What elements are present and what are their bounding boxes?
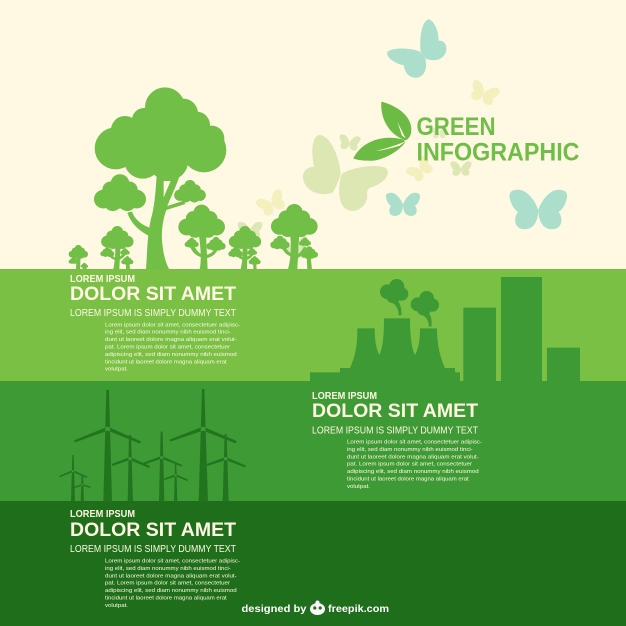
butterfly: pale yellow middle xyxy=(405,154,436,184)
building 2 xyxy=(501,277,542,381)
section 2 body: Lorem ipsum dolor sit amet, consectetuer adipisc- xyxy=(347,440,482,446)
butterfly: small teal xyxy=(386,193,420,216)
section 2 body: ing elit, sed diam nonummy nibh euismod tinci- xyxy=(347,447,473,453)
icon: freepik logo xyxy=(310,600,325,615)
footer credit: designed by xyxy=(242,603,307,615)
turbine 1 xyxy=(74,390,141,501)
section 1 heading: DOLOR SIT AMET xyxy=(70,283,236,305)
section 2 heading: DOLOR SIT AMET xyxy=(312,400,478,422)
butterfly: pale behind trees right xyxy=(284,235,314,262)
section 1 body: dunt ut laoreet dolore magna aliquam erat volut- xyxy=(105,337,237,343)
trees xyxy=(69,87,318,269)
tree: small 4 xyxy=(100,226,133,269)
section 2 kicker: LOREM IPSUM xyxy=(312,391,377,402)
section 1 body: volutpat. xyxy=(105,367,128,373)
butterfly: pale behind trees left xyxy=(238,222,262,239)
background: cream sky xyxy=(0,0,626,270)
band: light green xyxy=(0,269,626,381)
footer credit: freepik.com xyxy=(328,603,389,615)
section 3 body: volutpat. xyxy=(105,603,128,609)
leaves logo xyxy=(353,102,411,161)
butterfly: large pale green xyxy=(303,135,388,211)
section 3 kicker: LOREM IPSUM xyxy=(70,509,135,520)
building 3 xyxy=(547,348,580,381)
tree: small 2 xyxy=(228,226,261,269)
wind turbines xyxy=(59,389,246,501)
butterfly: pale green right xyxy=(450,161,472,176)
section 1 kicker: LOREM IPSUM xyxy=(70,274,135,285)
section 2 body: adipiscing elit, sed diam nonummy nibh euismod xyxy=(347,469,479,475)
section 3 body: pat. Lorem ipsum dolor sit amet, consectetuer xyxy=(105,581,230,587)
section 2 body: tincidunt ut laoreet dolore magna aliquam erat xyxy=(347,477,469,483)
section 3 body: adipiscing elit, sed diam nonummy nibh euismod xyxy=(105,588,237,594)
smoke right xyxy=(411,291,439,327)
band: dark green xyxy=(0,501,626,626)
section 1 text xyxy=(70,274,240,373)
turbine 3 xyxy=(143,432,182,501)
section 3 body: Lorem ipsum dolor sit amet, consectetuer adipisc- xyxy=(105,559,240,565)
butterfly: pale behind title xyxy=(432,128,447,138)
band: mid green xyxy=(0,381,626,501)
title xyxy=(416,113,580,166)
section 3 body xyxy=(105,559,240,609)
section 2 body: volutpat. xyxy=(347,484,370,490)
section 3 body: dunt ut laoreet dolore magna aliquam erat volut- xyxy=(105,573,237,579)
section 1 body xyxy=(105,322,240,373)
section 2 body xyxy=(347,440,482,490)
tree: large xyxy=(94,87,226,269)
section 2 body: dunt ut laoreet dolore magna aliquam erat volut- xyxy=(347,454,479,460)
tree: small 1 xyxy=(178,205,226,269)
turbine 4 xyxy=(169,389,237,501)
section 2 body: pat. Lorem ipsum dolor sit amet, consectetuer xyxy=(347,462,472,468)
section 1 body: adipiscing elit, sed diam nonummy nibh euismod xyxy=(105,352,237,358)
factory silhouette xyxy=(310,277,580,381)
building 1 xyxy=(463,308,496,381)
section 1 subheading: LOREM IPSUM IS SIMPLY DUMMY TEXT xyxy=(70,308,237,319)
turbine 5 xyxy=(207,434,246,501)
butterfly: pale yellow upper xyxy=(467,79,501,107)
smoke left xyxy=(380,279,408,315)
tree: small 3 xyxy=(270,204,318,269)
butterfly: top teal xyxy=(387,19,446,78)
title: INFOGRAPHIC xyxy=(416,138,580,166)
section 3 heading: DOLOR SIT AMET xyxy=(70,519,236,541)
section 1 body: pat. Lorem ipsum dolor sit amet, consectetuer xyxy=(105,344,230,350)
butterfly: pale green small xyxy=(338,134,361,151)
section 3 text xyxy=(70,509,240,609)
section 1 body: ing elit, sed diam nonummy nibh euismod tinci- xyxy=(105,330,231,336)
leaf: lower xyxy=(353,138,406,161)
leaf: upper xyxy=(381,102,411,140)
butterflies xyxy=(255,19,567,229)
section 3 body: tincidunt ut laoreet dolore magna aliquam erat xyxy=(105,596,227,602)
section 2 text xyxy=(312,391,482,490)
turbine 6 xyxy=(164,463,188,501)
turbine 8 xyxy=(74,475,91,501)
section 1 body: Lorem ipsum dolor sit amet, consectetuer adipisc- xyxy=(105,322,240,328)
turbine 7 xyxy=(59,455,87,501)
section 3 body: ing elit, sed diam nonummy nibh euismod tinci- xyxy=(105,566,231,572)
turbine 2 xyxy=(112,435,150,501)
section 2 subheading: LOREM IPSUM IS SIMPLY DUMMY TEXT xyxy=(312,426,479,436)
tree: small 5 xyxy=(69,245,88,269)
section 1 body: tincidunt ut laoreet dolore magna aliquam erat xyxy=(105,359,227,365)
section 3 subheading: LOREM IPSUM IS SIMPLY DUMMY TEXT xyxy=(70,544,237,555)
butterfly: big teal xyxy=(509,190,567,229)
butterfly: pale yellow left xyxy=(255,188,289,218)
cooling towers and base xyxy=(310,318,460,381)
footer credit xyxy=(242,600,389,615)
title: GREEN xyxy=(416,113,496,141)
